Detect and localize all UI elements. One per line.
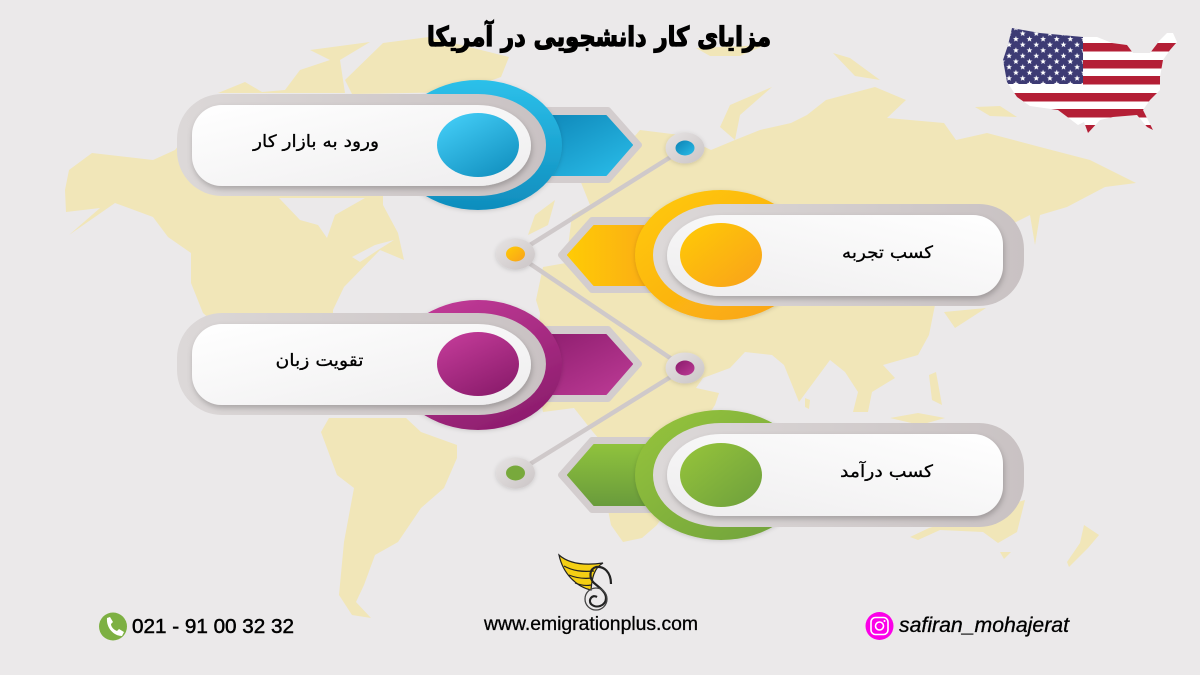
instagram contact <box>866 612 1070 640</box>
label: کسب تجربه <box>842 243 934 263</box>
circle: magenta <box>437 332 519 396</box>
label: کسب درآمد <box>840 460 934 482</box>
logo <box>559 555 611 610</box>
node: orange <box>496 238 535 270</box>
world map background <box>65 37 1136 618</box>
icon: instagram <box>866 612 894 640</box>
grey pill <box>653 204 1024 306</box>
ring: blue <box>394 80 562 210</box>
panel: کسب تجربه <box>561 190 1024 320</box>
panel: تقویت زبان <box>177 300 639 430</box>
grey pill <box>177 313 546 415</box>
grey pill <box>177 94 546 196</box>
phone contact <box>99 612 294 640</box>
icon: phone <box>99 612 127 640</box>
white pill <box>192 324 531 405</box>
ring: magenta <box>394 300 562 430</box>
arrow tab: magenta <box>520 329 639 399</box>
node: blue <box>666 132 704 164</box>
panel: کسب درآمد <box>561 410 1024 540</box>
arrow tab: orange <box>561 220 680 290</box>
node: green <box>496 458 535 488</box>
label: ورود به بازار کار <box>252 132 379 152</box>
ring: green <box>635 410 807 540</box>
white pill <box>192 105 531 186</box>
phone number: 021 - 91 00 32 32 <box>132 616 294 638</box>
connector lines <box>516 148 685 473</box>
grey pill <box>653 423 1024 527</box>
instagram handle: safiran_mohajerat <box>899 614 1070 637</box>
arrow tab: blue <box>520 110 639 180</box>
title: مزایای کار دانشجویی در آمریکا <box>427 20 771 53</box>
circle: orange <box>680 223 762 287</box>
panel: ورود به بازار کار <box>177 80 639 210</box>
ring: orange <box>635 190 807 320</box>
circle: blue <box>437 113 519 177</box>
white pill <box>667 215 1003 296</box>
node: magenta <box>666 352 704 384</box>
icon: USA flag map <box>1000 25 1180 137</box>
white pill <box>667 434 1003 516</box>
circle: green <box>680 443 762 507</box>
arrow tab: green <box>561 440 680 510</box>
label: تقویت زبان <box>276 351 364 371</box>
website: www.emigrationplus.com <box>483 614 698 635</box>
